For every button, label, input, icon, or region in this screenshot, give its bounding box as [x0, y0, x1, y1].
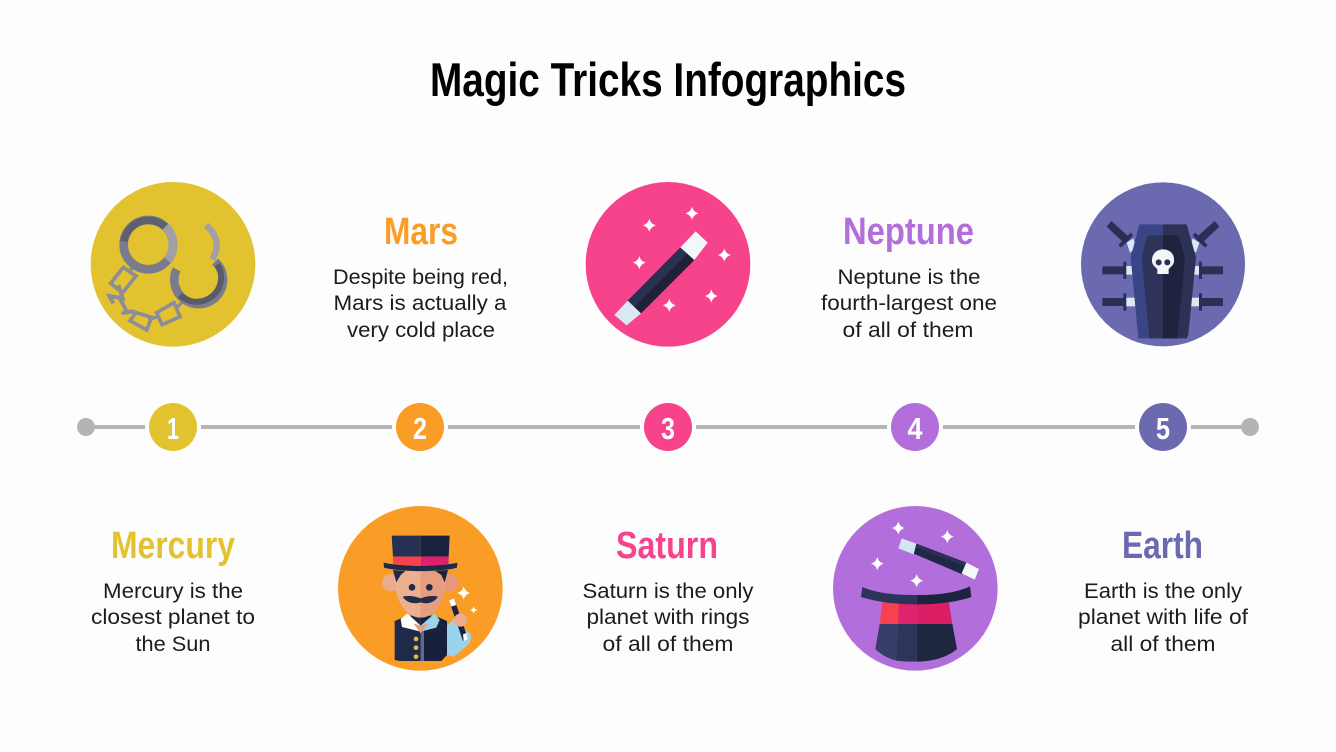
text: Earth description: [1078, 580, 1248, 656]
text: Neptune description: of all of them: [842, 319, 974, 342]
step 3: [640, 399, 696, 455]
text: Saturn description: [582, 580, 754, 656]
step 5: [1135, 399, 1191, 455]
heading: Neptune: Neptune: [843, 211, 974, 253]
step 4: 4: [908, 411, 923, 446]
text: Saturn description: of all of them: [602, 633, 734, 656]
heading: Mars: Mars: [384, 211, 458, 253]
text: Neptune description: fourth-largest one: [821, 292, 997, 315]
text: Neptune description: [821, 266, 997, 342]
heading: Earth: Earth: [1122, 525, 1203, 567]
icon: handcuffs: [91, 182, 255, 347]
text: Mars description: Despite being red,: [333, 266, 508, 289]
text: Mars description: Mars is actually a: [334, 292, 507, 315]
timeline end dot: [1241, 418, 1259, 436]
text: Mercury description: closest planet to: [91, 606, 255, 629]
text: Neptune description: Neptune is the: [838, 266, 980, 289]
text: Earth description: all of them: [1110, 633, 1216, 656]
text: Mercury description: the Sun: [136, 633, 210, 656]
timeline: [77, 399, 1259, 455]
title: Magic Tricks Infographics: [430, 53, 906, 106]
step 2: 2: [413, 411, 427, 446]
text: Saturn description: Saturn is the only: [582, 580, 754, 603]
heading: Saturn: Saturn: [616, 525, 718, 567]
text: Mars description: [333, 266, 508, 342]
text: Mars description: very cold place: [347, 319, 495, 342]
icon: coffin with swords: [1081, 182, 1245, 346]
step 1: 1: [167, 411, 179, 446]
icon: magician: [338, 506, 503, 671]
timeline start dot: [77, 418, 95, 436]
text: Earth description: Earth is the only: [1084, 580, 1243, 603]
text: Earth description: planet with life of: [1078, 606, 1248, 629]
text: Mercury description: [91, 580, 255, 656]
step 4: [887, 399, 943, 455]
icon: magic wand: [586, 182, 750, 347]
icon: top hat and wand: [833, 506, 998, 671]
text: Mercury description: Mercury is the: [103, 580, 243, 603]
step 1: [145, 399, 201, 455]
step 5: 5: [1156, 411, 1170, 446]
text: Saturn description: planet with rings: [586, 606, 750, 629]
step 3: 3: [661, 411, 675, 446]
step 2: [392, 399, 448, 455]
heading: Mercury: Mercury: [111, 525, 235, 567]
